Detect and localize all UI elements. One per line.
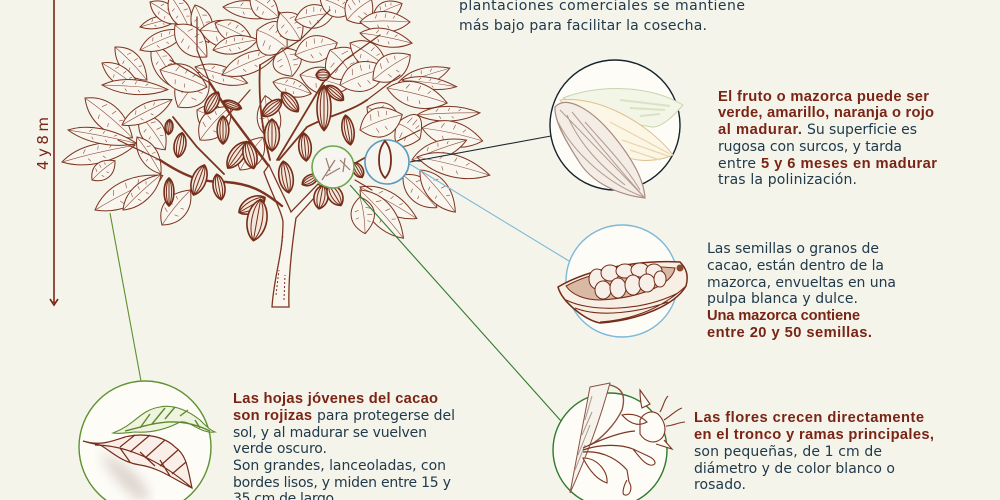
circle frame [566, 225, 678, 337]
flower buds [623, 449, 655, 495]
top text block: más bajo para facilitar la cosecha. [459, 18, 707, 34]
fruit text: 5 y 6 meses en madurar [761, 156, 937, 172]
fruit text: al madurar. [718, 122, 802, 138]
flower text: en el tronco y ramas principales, [694, 427, 934, 443]
flower text: rosado. [694, 477, 746, 493]
leaf text: son rojizas [233, 408, 312, 424]
leaf text: para protegerse del [317, 408, 455, 424]
leaf text: verde oscuro. [233, 441, 327, 457]
flower text [694, 410, 934, 493]
fruit circle panel [550, 60, 683, 198]
cacao tree illustration [60, 0, 492, 307]
seeds [589, 263, 666, 299]
green pod shading [620, 100, 670, 116]
flower small leaf [583, 458, 607, 483]
fruit text: rugosa con surcos, y tarda [718, 139, 902, 155]
circle frame [79, 381, 211, 500]
seed text: cacao, están dentro de la [707, 258, 884, 274]
flower branch [590, 385, 624, 445]
seed text: entre 20 y 50 semillas. [707, 325, 872, 341]
connector line: fruit [410, 136, 551, 162]
leaf shadow [100, 452, 150, 500]
leaf text [233, 391, 455, 500]
height arrow [34, 0, 58, 305]
icon: red leaf [83, 435, 192, 488]
small marker circle: fruit [365, 140, 409, 184]
yellow pod shading [610, 122, 670, 160]
small marker circle: flower [312, 146, 354, 188]
trunk and branches [118, 10, 420, 307]
icon: green leaf [113, 406, 215, 433]
fruit text: tras la polinización. [718, 172, 857, 188]
tree leaves [60, 0, 492, 246]
flower text: son pequeñas, de 1 cm de [694, 444, 882, 460]
icon: trunk [570, 383, 610, 493]
pod shell hatch [566, 286, 686, 322]
fruit text [718, 89, 937, 188]
fruit text: El fruto o mazorca puede ser [718, 89, 929, 105]
red leaf veins [95, 435, 192, 488]
brown pod ridges [558, 110, 644, 197]
seed text: Una mazorca contiene [707, 308, 860, 324]
circle frame [553, 393, 667, 500]
open pod inner cavity [566, 267, 675, 300]
top text block [459, 0, 745, 34]
seed text [707, 241, 896, 341]
fruit text: Su superficie es [807, 122, 917, 138]
fruit text: entre [718, 156, 756, 172]
leaf text: Las hojas jóvenes del cacao [233, 391, 438, 407]
leaf text: bordes lisos, y miden entre 15 y [233, 475, 451, 491]
seed text: Las semillas o granos de [707, 241, 879, 257]
connector line: seed [408, 163, 569, 261]
flower text: diámetro y de color blanco o [694, 461, 895, 477]
icon: open pod outer shell [558, 262, 687, 323]
flower stems [583, 431, 635, 470]
trunk hatch [575, 396, 592, 470]
seed text: mazorca, envueltas en una [707, 275, 896, 291]
seed text: pulpa blanca y dulce. [707, 291, 858, 307]
seed circle panel [558, 225, 687, 337]
connector line: leaf [110, 213, 141, 381]
leaf circle panel [79, 381, 215, 500]
green leaf veins [125, 407, 210, 431]
icon: brown pod [555, 102, 645, 198]
circle frame [550, 60, 680, 190]
height arrow: 4 y 8 m [34, 117, 52, 170]
icon: green pod [563, 89, 683, 127]
pod stem [676, 264, 684, 272]
flower circle panel [553, 383, 685, 500]
cacao pods on the tree [164, 70, 366, 242]
flower [622, 390, 685, 449]
fruit text: verde, amarillo, naranja o rojo [718, 105, 934, 121]
leaf text: Son grandes, lanceoladas, con [233, 458, 446, 474]
connector line: flower [350, 185, 561, 421]
flower text: Las flores crecen directamente [694, 410, 924, 426]
leaf text: sol, y al madurar se vuelven [233, 425, 427, 441]
icon: yellow pod [560, 99, 673, 160]
